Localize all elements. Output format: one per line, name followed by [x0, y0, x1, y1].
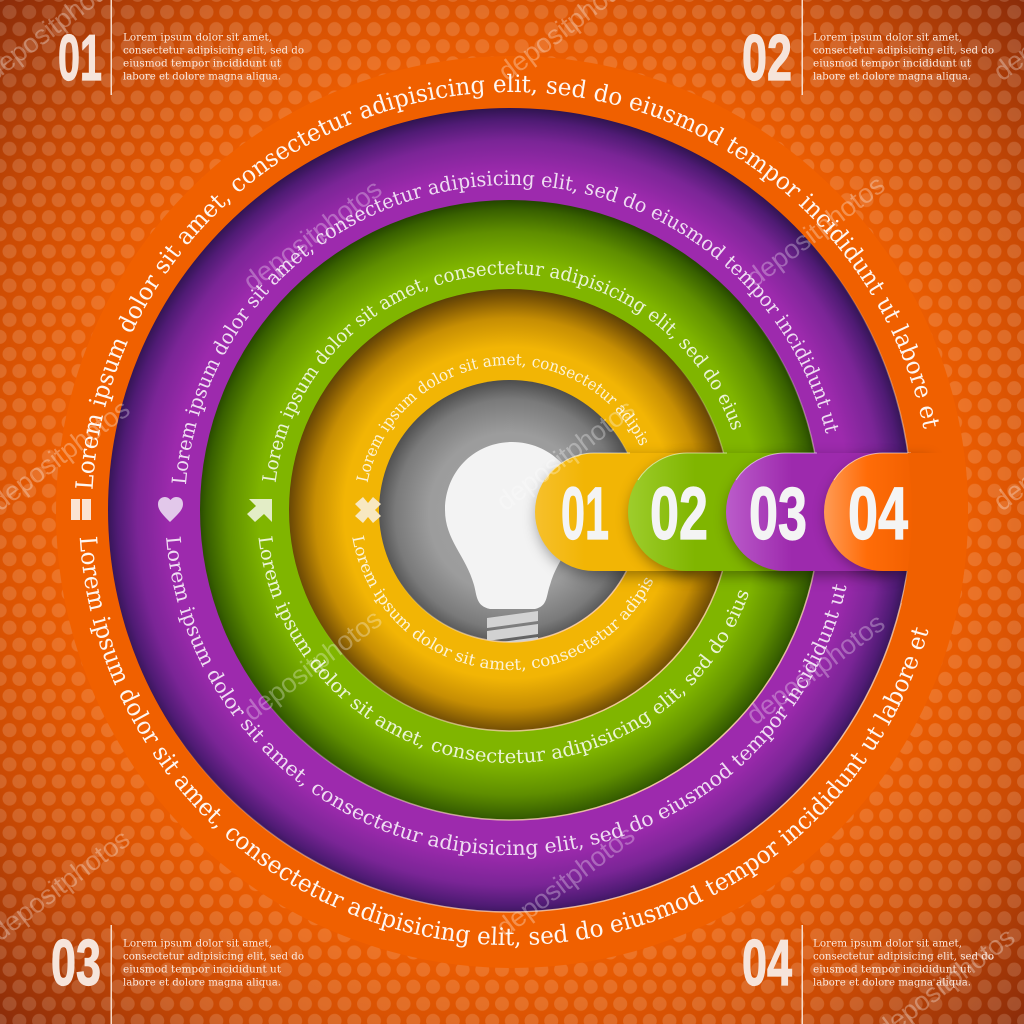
corner block 01: eiusmod tempor incididunt ut [123, 58, 282, 70]
corner block 01 [58, 0, 304, 95]
tab 01: yellow: 01 [561, 472, 609, 555]
watermark text: depositphotos [238, 604, 387, 727]
ring: outer orange disc [56, 56, 968, 968]
corner block 02: consectetur adipisicing elit, sed do [813, 44, 994, 56]
corner block 01: 01 [58, 21, 102, 94]
icon: cross [355, 497, 381, 523]
center: gray disc [379, 380, 641, 642]
curved text: green ring: Lorem ipsum dolor sit amet, consectetur adipisicing elit, sed do eius [258, 536, 748, 764]
corner block 04: 04 [742, 926, 792, 999]
ring: yellow disc [289, 289, 731, 731]
corner block 03: 03 [51, 926, 101, 999]
curved text: yellow ring: Lorem ipsum dolor sit amet, consectetur adipis [356, 354, 647, 482]
corner block 02: eiusmod tempor incididunt ut [813, 58, 972, 70]
icon: pause bars [71, 499, 91, 520]
watermark text: depositphotos [238, 174, 387, 297]
watermark text: depositphotos [491, 820, 640, 943]
icon: light bulb [445, 442, 562, 642]
corner block 01: consectetur adipisicing elit, sed do [123, 44, 304, 56]
ring: purple disc [108, 108, 912, 912]
tab 04: orange [824, 453, 930, 571]
curved text: yellow ring [352, 354, 653, 672]
corner block 02 [742, 0, 994, 95]
corner block 02: 02 [742, 21, 792, 94]
corner block 01: Lorem ipsum dolor sit amet, [123, 32, 272, 44]
tab 03: purple [726, 453, 890, 571]
corner block 01: labore et dolore magna aliqua. [123, 70, 281, 82]
corner block 03 [51, 925, 304, 1024]
curved text: orange ring: Lorem ipsum dolor sit amet, consectetur adipisicing elit, sed do eiusmod tempor incididunt ut labore et [75, 74, 939, 489]
corner block 04: eiusmod tempor incididunt ut [813, 964, 972, 976]
corner block 04: labore et dolore magna aliqua. [813, 976, 971, 988]
corner block 03: consectetur adipisicing elit, sed do [123, 950, 304, 962]
curved text: green ring [258, 261, 748, 764]
watermark text: depositphotos [741, 170, 890, 293]
icon: heart [158, 497, 183, 522]
curved text: orange ring: Lorem ipsum dolor sit amet, consectetur adipisicing elit, sed do eiusmod tempor incididunt ut labore et [80, 536, 928, 948]
tab 02: green [628, 453, 795, 571]
corner block 03: Lorem ipsum dolor sit amet, [123, 938, 272, 950]
curved text: purple ring: Lorem ipsum dolor sit amet, consectetur adipisicing elit, sed do eiusmod tempor incididunt ut [172, 170, 838, 484]
watermark text: depositphotos [491, 394, 640, 517]
corner block 04: consectetur adipisicing elit, sed do [813, 950, 994, 962]
icon: arrow [247, 499, 272, 522]
curved text: yellow ring: Lorem ipsum dolor sit amet, consectetur adipis [352, 535, 653, 672]
curved text: orange ring [75, 74, 939, 948]
tab 02: green: 02 [650, 472, 708, 555]
tab 03: purple: 03 [749, 472, 807, 555]
corner block 03: labore et dolore magna aliqua. [123, 976, 281, 988]
curved text: purple ring: Lorem ipsum dolor sit amet, consectetur adipisicing elit, sed do eiusmod tempor incididunt ut [166, 536, 846, 859]
corner block 04 [742, 925, 994, 1024]
tab 04 join with orange ring [902, 453, 968, 603]
corner block 02: labore et dolore magna aliqua. [813, 70, 971, 82]
curved text: green ring: Lorem ipsum dolor sit amet, consectetur adipisicing elit, sed do eius [262, 261, 741, 482]
ring: green disc [200, 200, 820, 820]
corner block 02: Lorem ipsum dolor sit amet, [813, 32, 962, 44]
tab 04: orange: 04 [848, 472, 908, 555]
corner block 04: Lorem ipsum dolor sit amet, [813, 938, 962, 950]
corner block 03: eiusmod tempor incididunt ut [123, 964, 282, 976]
tab 01: yellow [535, 453, 700, 571]
curved text: purple ring [166, 170, 846, 859]
watermark text: depositphotos [741, 608, 890, 731]
